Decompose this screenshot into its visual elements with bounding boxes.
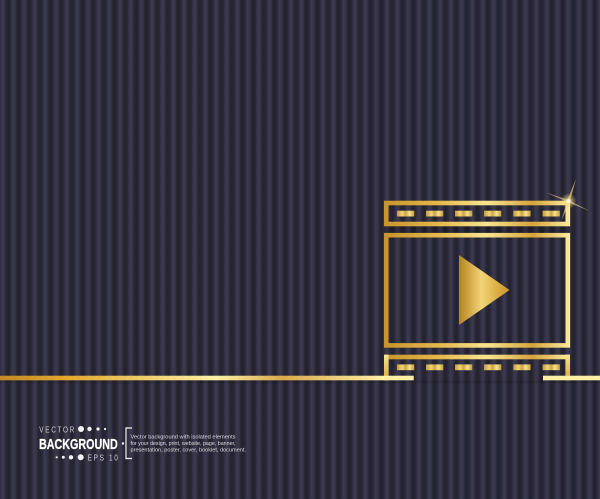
description text: presentation, poster, cover, booklet, document. <box>130 448 246 454</box>
bracket <box>126 428 132 458</box>
dots bottom <box>56 454 84 460</box>
text: BACKGROUND: BACKGROUND <box>39 437 118 453</box>
gold baseline left <box>0 376 414 380</box>
dots top <box>78 426 106 432</box>
play triangle <box>459 255 510 325</box>
film strip top <box>386 203 568 224</box>
gold baseline right <box>543 376 600 380</box>
description text <box>130 434 246 454</box>
description text: Vector background with isolated elements <box>130 434 236 440</box>
text: VECTOR: VECTOR <box>39 425 76 435</box>
icon: sparkle <box>546 179 590 220</box>
film strip bottom with baseline <box>0 355 600 380</box>
text: EPS 10: EPS 10 <box>88 453 119 463</box>
video frame <box>386 235 568 345</box>
description text: for your design, print, website, page, banner, <box>130 441 236 447</box>
icon: video player with film strips <box>0 203 600 380</box>
bracket nib <box>122 442 124 445</box>
logo: vector background eps 10 <box>39 425 246 463</box>
